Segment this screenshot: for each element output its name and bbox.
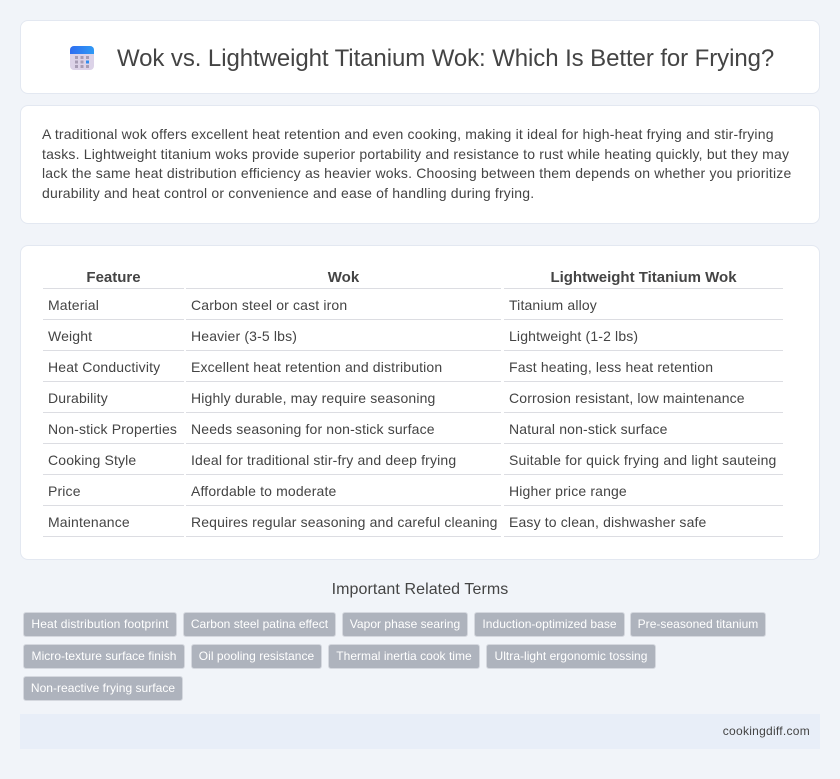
- intro text: [42, 126, 791, 201]
- tags: related terms: [23, 612, 766, 701]
- table rows: Excellent heat retention and distribution: [191, 359, 442, 375]
- intro text: lack the same heat distribution efficiency as heavier woks. Choosing between them depends on whether you prioritize: [42, 165, 791, 181]
- table rows: Heavier (3-5 lbs): [191, 328, 297, 344]
- table rows: Ideal for traditional stir-fry and deep frying: [191, 452, 456, 468]
- table rows: Highly durable, may require seasoning: [191, 390, 435, 406]
- table rows: Natural non-stick surface: [509, 421, 668, 437]
- table rows: Titanium alloy: [509, 297, 597, 313]
- table rows: Suitable for quick frying and light sauteing: [509, 452, 777, 468]
- table header: Wok: [328, 269, 359, 286]
- intro text: A traditional wok offers excellent heat retention and even cooking, making it ideal for high-heat frying and stir-frying: [42, 126, 774, 142]
- table rows: Needs seasoning for non-stick surface: [191, 421, 435, 437]
- table rows: Requires regular seasoning and careful cleaning: [191, 514, 498, 530]
- panel: comparison table: [20, 245, 820, 560]
- tags: related terms: Pre-seasoned titanium: [638, 617, 758, 631]
- title text: Wok vs. Lightweight Titanium Wok: Which Is Better for Frying?: [117, 45, 774, 72]
- tags: related terms: Ultra-light ergonomic tossing: [495, 649, 647, 663]
- table rows: Price: [48, 483, 81, 499]
- table rows: [43, 288, 783, 537]
- table rows: Higher price range: [509, 483, 627, 499]
- table rows: Easy to clean, dishwasher safe: [509, 514, 706, 530]
- table rows: Corrosion resistant, low maintenance: [509, 390, 745, 406]
- table header: Feature: [86, 269, 141, 286]
- footer: [20, 714, 820, 749]
- table rows: Heat Conductivity: [48, 359, 160, 375]
- table rows: Durability: [48, 390, 108, 406]
- table header: [86, 269, 737, 286]
- table rows: Maintenance: [48, 514, 130, 530]
- intro text: tasks. Lightweight titanium woks provide superior portability and resistance to rust while heating quickly, but they may: [42, 146, 789, 162]
- table rows: Lightweight (1-2 lbs): [509, 328, 638, 344]
- footer source: cookingdiff.com: [723, 724, 810, 738]
- table rows: Fast heating, less heat retention: [509, 359, 713, 375]
- panel: title: [20, 20, 820, 94]
- tags: related terms: Oil pooling resistance: [199, 649, 314, 663]
- table header: Lightweight Titanium Wok: [550, 269, 737, 286]
- tags: related terms: Induction-optimized base: [482, 617, 617, 631]
- table rows: Weight: [48, 328, 92, 344]
- table rows: Carbon steel or cast iron: [191, 297, 347, 313]
- icon: calendar: [70, 46, 94, 70]
- heading: related terms: Important Related Terms: [332, 581, 508, 598]
- tags: related terms: Heat distribution footprint: [31, 617, 169, 631]
- tags: related terms: Non-reactive frying surface: [31, 681, 175, 695]
- tags: related terms: Thermal inertia cook time: [336, 649, 472, 663]
- tags: related terms: Carbon steel patina effect: [191, 617, 328, 631]
- table rows: Affordable to moderate: [191, 483, 336, 499]
- table rows: Non-stick Properties: [48, 421, 177, 437]
- tags: related terms: Vapor phase searing: [350, 617, 460, 631]
- tags: related terms: Micro-texture surface finish: [32, 649, 176, 663]
- table rows: Cooking Style: [48, 452, 136, 468]
- intro text: durability and heat control or convenience and ease of handling during frying.: [42, 185, 534, 201]
- panel: introduction: [20, 105, 820, 224]
- table rows: Material: [48, 297, 99, 313]
